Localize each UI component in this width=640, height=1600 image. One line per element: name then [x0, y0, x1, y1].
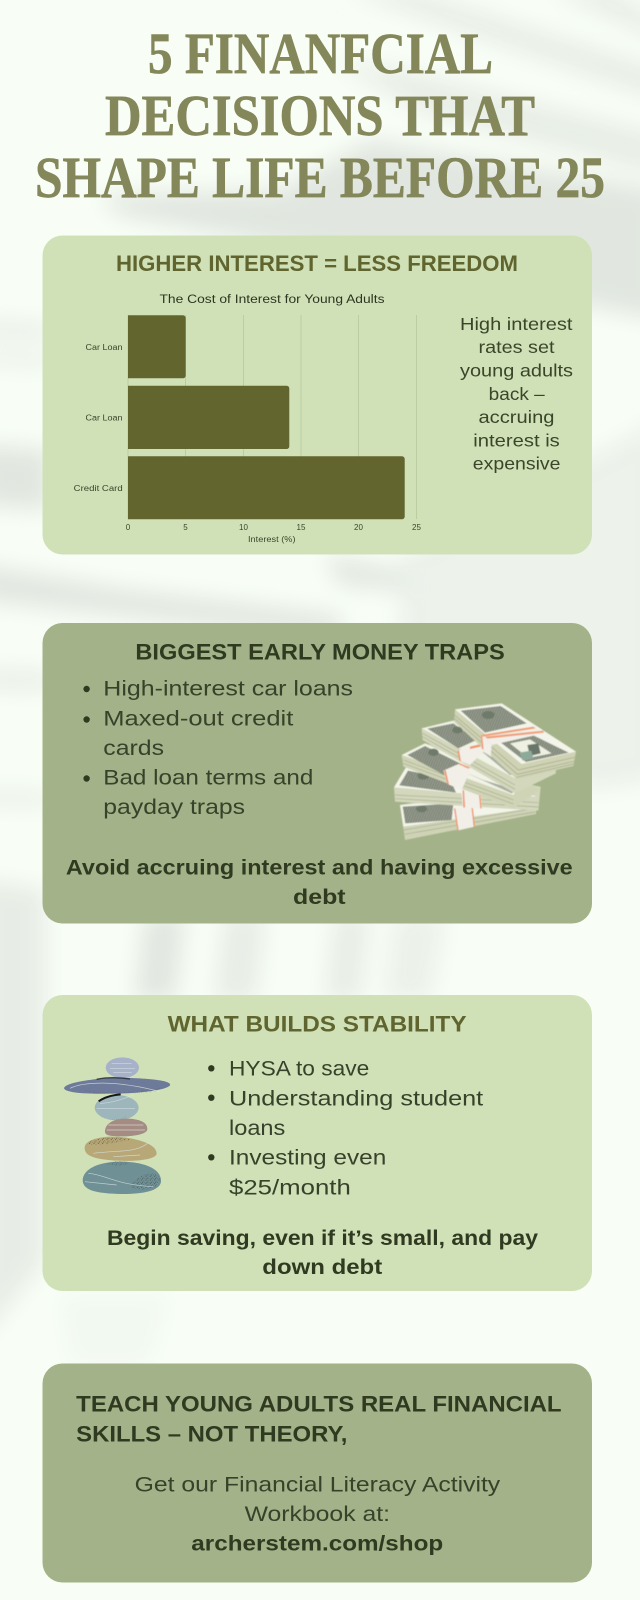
- list: money traps: High-interest car loans: [103, 678, 353, 701]
- list: stability: loans: [229, 1117, 285, 1140]
- closing line: begin saving: down debt: [262, 1256, 382, 1279]
- closing line: avoid debt: debt: [293, 886, 346, 909]
- heading: stability: WHAT BUILDS STABILITY: [168, 1012, 467, 1037]
- list: money traps: Maxed-out credit: [103, 707, 293, 730]
- bar chart: cost of interest: 10: [239, 523, 248, 532]
- text: high interest note: [460, 314, 573, 473]
- list: stability: HYSA to save: [229, 1058, 369, 1081]
- text: high interest note: rates set: [478, 337, 555, 357]
- bar chart: cost of interest: [74, 294, 421, 544]
- list: money traps: Bad loan terms and: [103, 767, 313, 790]
- list: stability: [208, 1058, 483, 1199]
- title: 5 FINANFCIAL: [148, 21, 493, 86]
- bar chart: cost of interest: 5: [183, 523, 188, 532]
- bar chart: cost of interest: 25: [412, 523, 421, 532]
- text: high interest note: young adults: [460, 361, 573, 381]
- bar chart: cost of interest: Interest (%): [248, 535, 296, 544]
- bar chart: cost of interest: Car Loan: [86, 414, 122, 423]
- text: workbook offer: archerstem.com/shop: [191, 1532, 443, 1555]
- closing line: avoid debt: [66, 856, 573, 909]
- bar chart: cost of interest: The Cost of Interest for Young Adults: [160, 294, 385, 306]
- bar chart: cost of interest: 0: [126, 523, 131, 532]
- panel: what builds stability: [42, 995, 592, 1291]
- title: [35, 21, 605, 210]
- closing line: avoid debt: Avoid accruing interest and having excessive: [66, 856, 573, 879]
- list: money traps: cards: [103, 737, 164, 760]
- text: workbook offer: Workbook at:: [245, 1503, 390, 1526]
- text: high interest note: back –: [489, 384, 545, 404]
- bar chart: cost of interest: 20: [354, 523, 363, 532]
- text: high interest note: expensive: [473, 453, 560, 473]
- third stack: [402, 743, 540, 808]
- list: stability: $25/month: [229, 1176, 351, 1199]
- bar chart: cost of interest: Credit Card: [74, 484, 123, 493]
- panel: higher interest: [42, 236, 592, 554]
- list: stability: Understanding student: [229, 1087, 483, 1110]
- text: workbook offer: Get our Financial Literacy Activity: [135, 1474, 501, 1497]
- text: workbook offer: [135, 1474, 501, 1555]
- bottom stack: [400, 790, 536, 840]
- text: high interest note: High interest: [460, 314, 573, 334]
- icon: stacks of money: [394, 703, 576, 840]
- bar chart: cost of interest: 15: [297, 523, 306, 532]
- top stack: [454, 703, 576, 779]
- heading: money traps: BIGGEST EARLY MONEY TRAPS: [135, 639, 505, 664]
- list: stability: Investing even: [229, 1147, 386, 1170]
- bar chart: cost of interest: Car Loan: [86, 343, 122, 352]
- closing line: begin saving: [107, 1227, 538, 1279]
- heading: teach young adults: TEACH YOUNG ADULTS REAL FINANCIAL: [76, 1392, 562, 1417]
- text: high interest note: accruing: [478, 407, 554, 427]
- text: high interest note: interest is: [473, 431, 560, 451]
- title: DECISIONS THAT: [105, 83, 535, 148]
- heading: higher interest: HIGHER INTEREST = LESS FREEDOM: [116, 251, 518, 276]
- list: money traps: [83, 678, 353, 819]
- panel: call to action: [42, 1364, 592, 1582]
- heading: teach young adults: [76, 1392, 562, 1447]
- fourth stack: [422, 721, 556, 793]
- panel: money traps: [42, 623, 592, 924]
- closing line: begin saving: Begin saving, even if it’s small, and pay: [107, 1227, 538, 1250]
- heading: teach young adults: SKILLS – NOT THEORY,: [76, 1422, 347, 1447]
- icon: balanced stones: [64, 1057, 170, 1194]
- second stack: [394, 767, 541, 811]
- list: money traps: payday traps: [103, 796, 245, 819]
